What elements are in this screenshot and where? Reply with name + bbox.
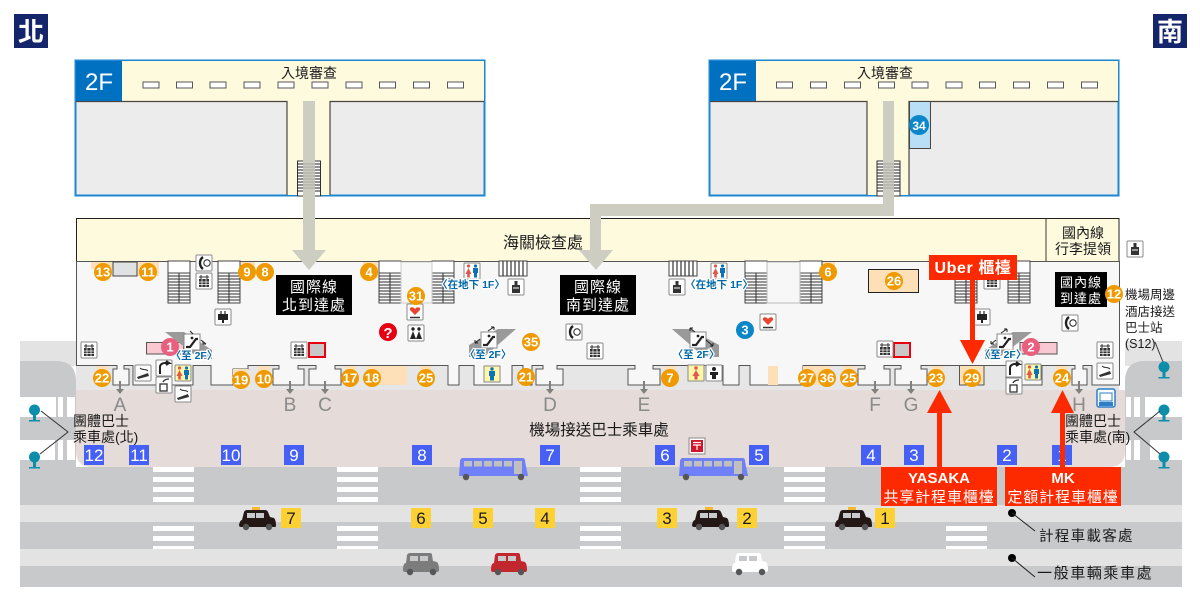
facility icons bbox=[81, 241, 1143, 402]
callout: MK counter bbox=[1005, 390, 1121, 506]
door letters: G bbox=[904, 395, 918, 416]
numbered shop badges: 8 bbox=[261, 264, 269, 280]
bus pickup zone bbox=[76, 390, 1125, 467]
icon: post box bbox=[689, 438, 705, 454]
door letters: C bbox=[318, 395, 332, 416]
arrival label south bbox=[560, 275, 636, 315]
escalator captions: 〈在地下 1F〉 bbox=[437, 278, 505, 291]
callout: YASAKA counter: YASAKA bbox=[908, 470, 970, 487]
door letters: F bbox=[869, 395, 881, 416]
panel: customs hall: 行李提領 bbox=[1055, 241, 1111, 257]
escalator direction arrows bbox=[190, 327, 1007, 346]
transfer walkway arrow north bbox=[292, 101, 326, 270]
numbered shop badges bbox=[93, 263, 1123, 389]
transfer walkway arrow south bbox=[579, 101, 894, 270]
numbered shop badges: 36 bbox=[820, 370, 834, 386]
general vehicle pickup callout bbox=[1008, 554, 1153, 582]
panel: customs hall bbox=[76, 218, 1119, 262]
pink and blue badges: 3 bbox=[741, 322, 749, 338]
heading: south marker: 南 bbox=[1157, 17, 1183, 47]
callout: Uber counter: Uber 櫃檯 bbox=[934, 258, 1012, 277]
arrival label north bbox=[276, 275, 352, 315]
panel: arrivals floor bbox=[76, 261, 1120, 390]
red boxes bbox=[309, 343, 910, 357]
bus stop numbers: 8 bbox=[417, 446, 427, 465]
taxi stop numbers: 2 bbox=[742, 509, 752, 528]
taxi stop numbers: 1 bbox=[880, 509, 890, 528]
numbered shop badges: 7 bbox=[666, 370, 674, 386]
panel: 2F south inset bbox=[710, 60, 1118, 196]
arrival label south: 國際線 bbox=[574, 279, 622, 296]
bus stop numbers: 3 bbox=[909, 446, 919, 465]
numbered shop badges: 35 bbox=[524, 334, 538, 350]
numbered shop badges: 10 bbox=[257, 372, 271, 386]
panel: customs hall: 海關檢查處 bbox=[503, 234, 583, 252]
escalator captions: 〈至 2F〉 bbox=[465, 349, 511, 361]
pink and blue badges bbox=[161, 321, 1040, 356]
taxi pickup callout bbox=[1008, 509, 1134, 545]
door letters: D bbox=[543, 395, 557, 416]
escalator ramps bbox=[165, 329, 1032, 359]
icon: info question bbox=[379, 323, 397, 342]
panel: 2F south inset: 34 bbox=[912, 119, 926, 133]
panel: 2F north inset bbox=[76, 60, 484, 196]
bus stop numbers bbox=[84, 445, 1072, 465]
bus stop numbers: 12 bbox=[85, 446, 103, 465]
group bus pickup north callout: 團體巴士 bbox=[73, 413, 129, 429]
panel: 2F north inset: 入境審查 bbox=[281, 65, 337, 81]
numbered shop badges: 22 bbox=[95, 370, 109, 386]
numbered shop badges: 25 bbox=[842, 370, 856, 386]
taxi pickup callout: 計程車載客處 bbox=[1039, 528, 1134, 545]
arrival label domestic: 到達處 bbox=[1060, 291, 1102, 306]
hotel shuttle bus stop callout bbox=[1125, 287, 1176, 378]
car: white bbox=[732, 553, 768, 575]
callout: YASAKA counter: 共享計程車櫃檯 bbox=[883, 489, 995, 506]
hotel shuttle bus stop callout: (S12) bbox=[1125, 337, 1156, 351]
bus stop numbers: 4 bbox=[866, 446, 876, 465]
taxis bbox=[239, 507, 872, 530]
panel: 2F north inset: 2F bbox=[85, 69, 113, 96]
numbered shop badges: 19 bbox=[234, 372, 248, 388]
bus stop numbers: 1 bbox=[1057, 446, 1067, 465]
taxi stop numbers: 7 bbox=[286, 509, 296, 528]
group bus pickup south callout: 乘車處(南) bbox=[1065, 429, 1130, 445]
hotel shuttle bus stop callout: 巴士站 bbox=[1125, 321, 1163, 335]
numbered shop badges: 12 bbox=[1107, 286, 1121, 302]
numbered shop badges: 27 bbox=[800, 370, 814, 386]
door letters: H bbox=[1072, 395, 1086, 416]
heading: north marker: 北 bbox=[18, 17, 44, 47]
escalator captions: 〈至 2F〉 bbox=[171, 350, 217, 362]
numbered shop badges: 24 bbox=[1055, 370, 1070, 386]
numbered shop badges: 29 bbox=[965, 370, 979, 386]
escalator captions: 〈至 2F〉 bbox=[673, 349, 719, 361]
numbered shop badges: 17 bbox=[343, 370, 357, 386]
icon: bus stand bbox=[1097, 389, 1115, 407]
car: grey bbox=[403, 553, 439, 575]
arrival label north: 北到達處 bbox=[282, 297, 346, 314]
general vehicle pickup callout: 一般車輛乘車處 bbox=[1037, 565, 1153, 582]
crosswalks bbox=[153, 467, 987, 549]
numbered shop badges: 11 bbox=[141, 264, 155, 280]
callout: MK counter: MK bbox=[1051, 470, 1075, 487]
panel: customs hall: 國內線 bbox=[1062, 225, 1104, 241]
taxi stop numbers: 6 bbox=[416, 509, 426, 528]
escalator captions: 〈至 2F〉 bbox=[980, 349, 1026, 361]
numbered shop badges: 21 bbox=[519, 370, 533, 384]
group bus pickup south callout bbox=[1065, 404, 1170, 468]
door letters: E bbox=[638, 395, 650, 416]
door letters: A bbox=[114, 395, 127, 416]
taxi stop numbers: 3 bbox=[662, 509, 672, 528]
road surface bbox=[20, 341, 1182, 587]
numbered shop badges: 23 bbox=[929, 370, 943, 386]
pink and blue badges: 1 bbox=[166, 340, 174, 354]
bus stop numbers: 2 bbox=[1002, 446, 1012, 465]
numbered shop badges: 13 bbox=[96, 264, 110, 280]
icon: meeting point bbox=[408, 325, 424, 341]
bus stop numbers: 9 bbox=[289, 446, 299, 465]
numbered shop badges: 18 bbox=[365, 370, 379, 386]
panel: 2F south inset: 2F bbox=[719, 69, 747, 96]
bus stop numbers: 7 bbox=[545, 446, 555, 465]
numbered shop badges: 31 bbox=[409, 288, 423, 304]
group bus pickup north callout bbox=[29, 404, 138, 468]
numbered shop badges: 26 bbox=[887, 274, 901, 288]
buses bbox=[459, 458, 748, 480]
numbered shop badges: 9 bbox=[243, 264, 251, 280]
heading: south marker bbox=[1153, 14, 1187, 48]
callout: YASAKA counter bbox=[881, 390, 997, 506]
car: red bbox=[491, 553, 527, 575]
arrival label domestic: 國內線 bbox=[1060, 275, 1102, 290]
panel: 2F south inset: 入境審查 bbox=[857, 65, 913, 81]
arrival label domestic bbox=[1055, 272, 1107, 307]
taxi stop numbers bbox=[281, 508, 895, 528]
numbered shop badges: 25 bbox=[419, 370, 433, 386]
airport shuttle pickup label: 機場接送巴士乘車處 bbox=[529, 421, 669, 439]
bus stop numbers: 11 bbox=[130, 446, 148, 465]
callout: MK counter: 定額計程車櫃檯 bbox=[1007, 489, 1119, 506]
escalator captions bbox=[171, 278, 1026, 362]
numbered shop badges: 6 bbox=[824, 264, 832, 280]
bus stop numbers: 10 bbox=[222, 446, 240, 465]
taxi stop numbers: 5 bbox=[478, 509, 488, 528]
arrival label south: 南到達處 bbox=[566, 297, 630, 314]
door letters: B bbox=[284, 395, 296, 416]
hotel shuttle bus stop callout: 酒店接送 bbox=[1125, 304, 1176, 319]
hotel shuttle bus stop callout: 機場周邊 bbox=[1125, 287, 1176, 302]
bus stop numbers: 5 bbox=[754, 446, 764, 465]
icon: baby room bbox=[706, 365, 722, 381]
icon: info question: ? bbox=[383, 325, 393, 342]
icon: men's toilet bbox=[484, 366, 500, 382]
escalator captions: 〈在地下 1F〉 bbox=[685, 278, 753, 291]
bus stop numbers: 6 bbox=[660, 446, 670, 465]
arrival label north: 國際線 bbox=[290, 279, 338, 296]
numbered shop badges: 4 bbox=[365, 264, 373, 280]
pink and blue badges: 2 bbox=[1027, 340, 1035, 354]
group bus pickup south callout: 團體巴士 bbox=[1065, 413, 1121, 429]
heading: north marker bbox=[14, 14, 48, 48]
callout: Uber counter bbox=[929, 255, 1017, 364]
group bus pickup north callout: 乘車處(北) bbox=[73, 429, 138, 445]
taxi stop numbers: 4 bbox=[540, 509, 550, 528]
door letters bbox=[114, 381, 1086, 416]
icon: women's toilet bbox=[688, 365, 704, 381]
